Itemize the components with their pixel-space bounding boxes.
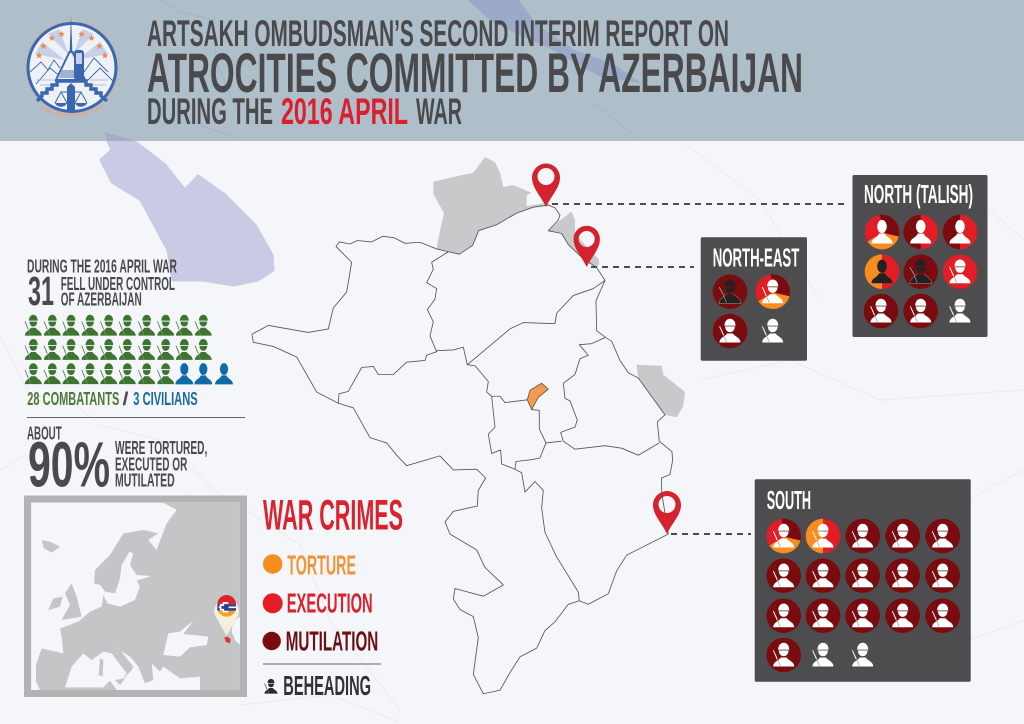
dotted connector: north-east <box>591 266 694 268</box>
panel: North-East <box>701 237 807 361</box>
legend item: execution <box>263 588 373 619</box>
occupied area: east <box>637 365 685 417</box>
statistic: about 90%: EXECUTED OR <box>115 455 187 475</box>
legend item: execution: EXECUTION <box>287 588 373 619</box>
pictogram caption: 3 CIVILIANS <box>133 389 198 409</box>
statistic: about 90% <box>27 423 207 501</box>
title line 3: WAR <box>416 91 462 132</box>
statistic: about 90%: 90% <box>28 429 110 501</box>
legend item: beheading: BEHEADING <box>283 670 371 701</box>
pictogram caption: 28 COMBATANTS <box>27 389 119 409</box>
pin: north <box>532 164 560 207</box>
panel: South: SOUTH <box>767 485 811 515</box>
statistic: 31 fell under control: DURING THE 2016 APRIL WAR <box>27 257 177 277</box>
locator map of Europe <box>28 499 244 694</box>
map of Artsakh <box>252 157 685 694</box>
legend item: mutilation: MUTILATION <box>286 626 378 657</box>
header band <box>0 0 1024 141</box>
occupied area: north-east <box>548 211 599 268</box>
statistic: 31 fell under control: OF AZERBAIJAN <box>61 290 142 310</box>
statistic: 31 fell under control: 31 <box>28 268 54 314</box>
statistic: 31 fell under control: FELL UNDER CONTROL <box>61 274 175 294</box>
panel: South <box>755 479 971 682</box>
title line 3: 2016 APRIL <box>281 91 408 132</box>
legend: war crimes <box>262 492 403 701</box>
statistic: 31 fell under control <box>27 257 177 314</box>
victim icons <box>766 519 960 672</box>
statistic: about 90%: MUTILATED <box>115 471 175 491</box>
logo: Artsakh Ombudsman emblem <box>26 15 118 115</box>
legend item: beheading <box>264 670 371 701</box>
dotted connector: south <box>671 533 751 535</box>
lake <box>101 132 273 285</box>
statistic: about 90%: WERE TORTURED, <box>115 438 207 458</box>
title <box>147 13 803 132</box>
legend heading: WAR CRIMES <box>263 492 403 540</box>
location pin with Artsakh flag <box>214 595 239 643</box>
panel: North (Talish) <box>852 175 988 337</box>
Shushi region highlighted <box>527 383 548 410</box>
statistic: about 90%: ABOUT <box>27 423 62 443</box>
pin: south <box>653 491 681 534</box>
outer border <box>252 205 673 694</box>
legend item: mutilation <box>262 626 378 657</box>
pictogram caption: / <box>122 389 128 409</box>
pin: north-east <box>574 226 600 267</box>
title line 3: DURING THE <box>147 91 273 132</box>
legend item: torture <box>263 549 356 580</box>
victim icons <box>864 215 977 328</box>
occupied area: north-west <box>433 157 548 254</box>
legend item: torture: TORTURE <box>287 549 356 580</box>
pictogram: 28 combatants and 3 civilians <box>25 315 233 384</box>
panel heading: NORTH-EAST <box>713 243 799 273</box>
dotted connector: north <box>552 203 846 205</box>
victim icons <box>713 274 790 348</box>
internal district borders <box>338 252 659 601</box>
